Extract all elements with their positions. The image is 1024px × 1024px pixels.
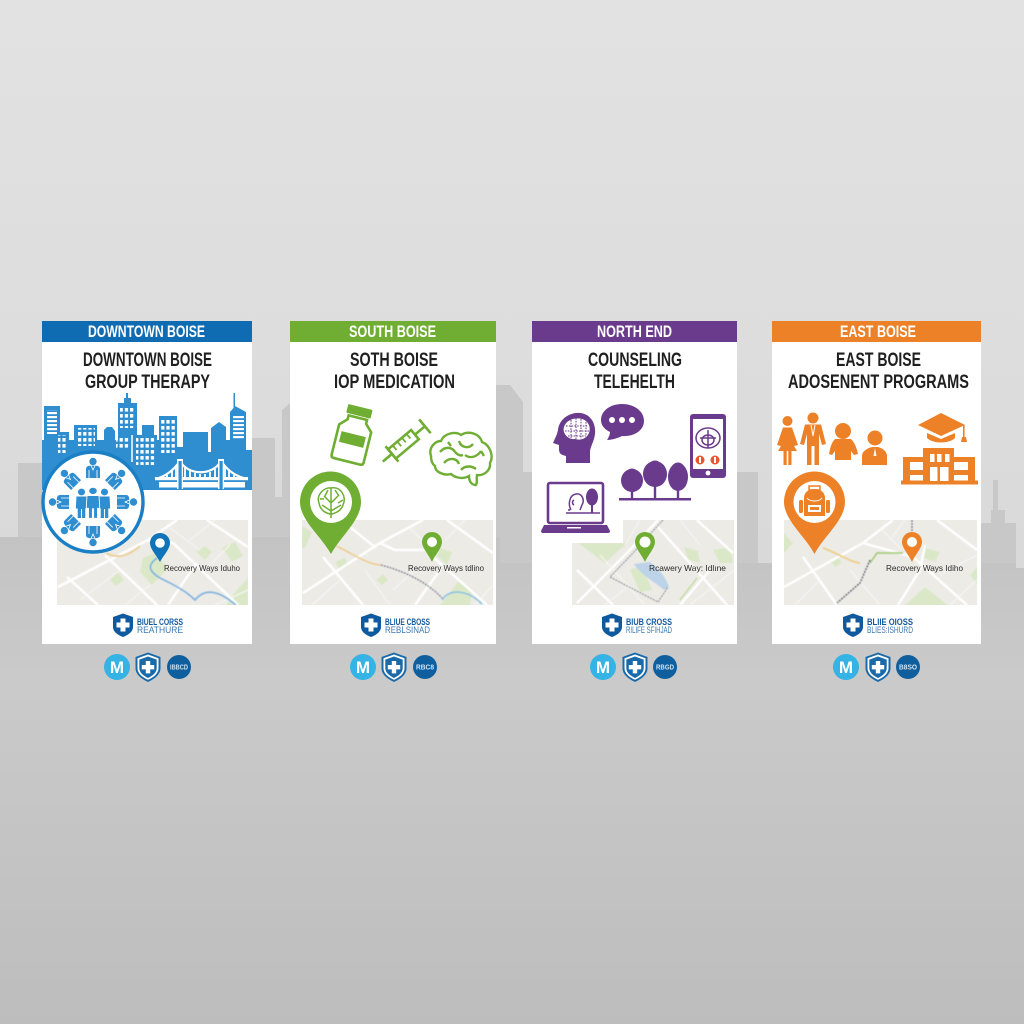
accreditation badges: M (110, 658, 124, 677)
map (300, 518, 495, 607)
logo: Blue Cross (602, 614, 672, 637)
icon: medication bottle (331, 403, 377, 465)
icon: trees (619, 460, 691, 500)
logo: Blue Cross (113, 614, 183, 637)
map label: Recovery Ways Iduho (164, 563, 240, 573)
icon: phone (690, 414, 726, 478)
title: DOWNTOWN BOISE (83, 350, 212, 371)
big map pin with brain (300, 471, 361, 554)
icon: head with brain (553, 413, 595, 463)
title: EAST BOISE (836, 350, 921, 371)
accreditation badges: RBGD (656, 664, 674, 672)
icon: laptop telehealth (541, 483, 610, 533)
header band (532, 321, 737, 342)
header band: NORTH END (597, 323, 672, 341)
panel: South Boise (290, 321, 496, 644)
title (83, 350, 212, 393)
header band (290, 321, 496, 342)
title: IOP MEDICATION (334, 372, 455, 393)
accreditation badges: IBBCD (170, 664, 188, 672)
map pin (635, 532, 655, 562)
map (782, 518, 979, 607)
title: ADOSENENT PROGRAMS (788, 372, 969, 393)
title: COUNSELING (588, 350, 682, 371)
map label: Recovery Ways tdlino (408, 563, 484, 573)
header band (772, 321, 981, 342)
title: TELEHELTH (594, 372, 675, 393)
accreditation badges: M (356, 658, 370, 677)
logo: Blue Cross: BIUEL CORSS (137, 617, 183, 627)
accreditation badges (833, 652, 920, 682)
accreditation badges: RBC8 (416, 664, 434, 672)
map pin (902, 532, 922, 562)
title: SOTH BOISE (350, 350, 438, 371)
logo: Blue Cross: BIUB CROSS (626, 617, 672, 627)
logo: Blue Cross: BLIES:ISHURD (867, 625, 913, 635)
header band (42, 321, 252, 342)
accreditation badges: B8SO (899, 664, 918, 672)
title (788, 350, 969, 393)
accreditation badges (350, 652, 437, 682)
map pin (150, 533, 170, 562)
map label: Rcawery Way: Idlıne (649, 563, 726, 573)
logo: Blue Cross: BLIIE OIOSS (867, 617, 913, 627)
map label: Recovery Ways Idiho (886, 563, 963, 573)
panel: North End (532, 321, 737, 644)
icon: speech bubble (601, 404, 644, 440)
panel: East Boise (772, 321, 981, 644)
accreditation badges: M (839, 658, 853, 677)
logo: Blue Cross: RILIFE SFIHJAD (626, 625, 672, 635)
big map pin with backpack (784, 471, 845, 554)
title: GROUP THERAPY (85, 372, 210, 393)
map (570, 518, 736, 607)
icon: family and students (777, 412, 887, 465)
logo: Blue Cross: BLIUE CBOSS (385, 617, 430, 627)
icon: graduation cap (918, 413, 967, 442)
header band: EAST BOISE (840, 323, 916, 341)
logo: Blue Cross: REBLSINAD (385, 625, 430, 635)
accreditation badges (104, 652, 191, 682)
panel: Downtown Boise (42, 321, 252, 644)
header band: SOUTH BOISE (349, 323, 436, 341)
map pin (422, 532, 442, 562)
logo: Blue Cross (361, 614, 430, 637)
logo: Blue Cross: REATHURE (137, 625, 183, 635)
icon: school building (901, 448, 978, 484)
accreditation badges: M (596, 658, 610, 677)
header band: DOWNTOWN BOISE (88, 323, 205, 341)
icon: city skyline with bridge (42, 393, 252, 490)
map (55, 518, 250, 607)
icon: brain (430, 433, 492, 485)
title (334, 350, 455, 393)
title (588, 350, 682, 393)
icon: group therapy circle (43, 452, 143, 552)
background: city skyline silhouette (18, 385, 1016, 570)
icon: syringe (376, 419, 431, 469)
logo: Blue Cross (843, 614, 913, 637)
accreditation badges (590, 652, 677, 682)
